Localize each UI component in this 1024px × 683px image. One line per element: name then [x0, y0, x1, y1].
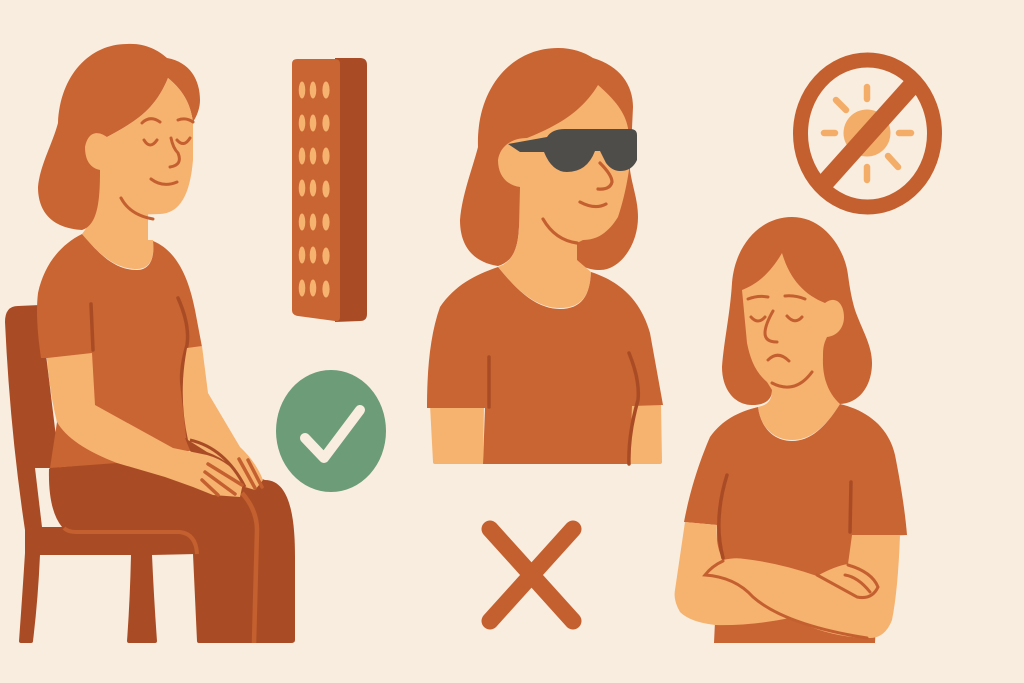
figure: sad woman with crossed arms [675, 217, 907, 643]
hair [38, 44, 200, 230]
crossed arms [675, 522, 900, 638]
light therapy panel [292, 58, 367, 322]
hair [722, 217, 872, 405]
torso [684, 404, 907, 643]
figure: woman wearing sunglasses [427, 48, 663, 464]
arms [430, 404, 662, 464]
sunglasses [508, 129, 637, 172]
face and neck [742, 253, 844, 440]
near arm [47, 353, 243, 497]
face [85, 78, 193, 215]
neck and face [498, 85, 629, 308]
legs [49, 450, 295, 643]
hair [460, 48, 638, 270]
figure: seated woman on chair [5, 44, 295, 643]
face lines [748, 296, 812, 387]
icon: no sun sign [800, 60, 934, 207]
neck [82, 165, 153, 269]
icon: green check badge [276, 370, 386, 492]
knee shadow [185, 438, 247, 490]
far arm [183, 346, 263, 490]
icon: red cross [490, 529, 573, 621]
torso [427, 267, 663, 464]
torso [37, 234, 202, 468]
chair [5, 305, 197, 643]
face lines [543, 163, 612, 243]
